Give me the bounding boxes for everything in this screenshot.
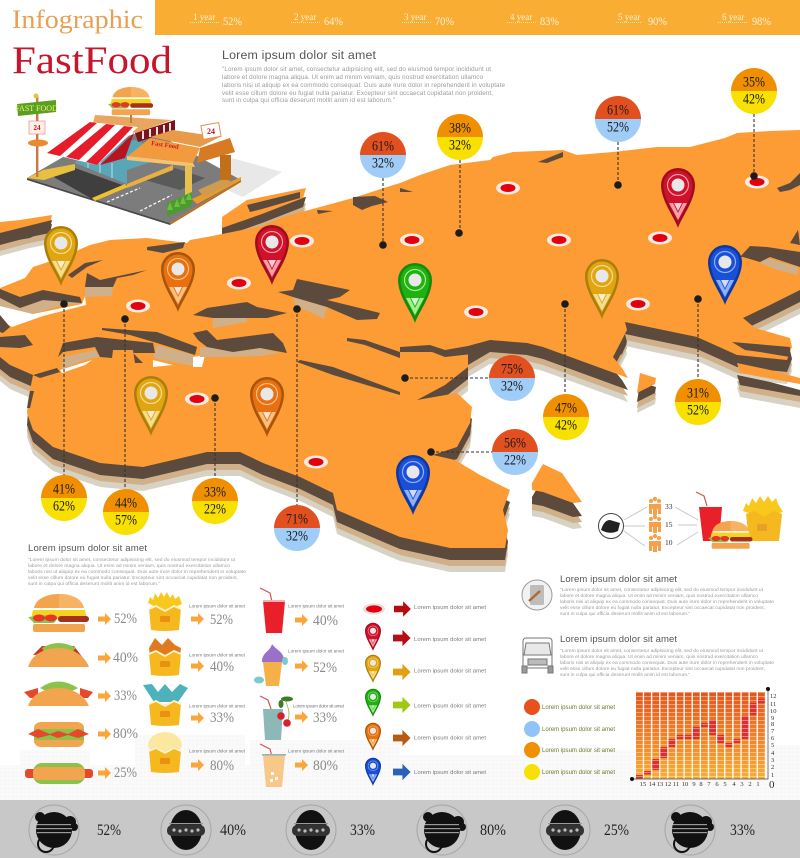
intro text block — [222, 48, 505, 104]
legend gold pin — [365, 655, 486, 683]
left text block: laboris nisi ut aliquip ex ea commodo consequat. Duis aute irure dolor in reprehenderit in voluptate — [28, 569, 246, 575]
blue chicken row — [143, 684, 246, 726]
connector lines — [624, 507, 698, 546]
silhouette 80%: 80% — [480, 822, 506, 839]
popcorn row — [148, 732, 246, 774]
juice row: 80% — [313, 758, 338, 774]
icon: people — [649, 497, 661, 552]
bar chart: 14 — [649, 781, 656, 788]
right text block 1: "Lorem ipsum dolor sit amet, consectetur adipisicing elit, sed do eiusmod tempor incididunt ut — [560, 587, 764, 593]
soda row — [260, 588, 345, 633]
bar chart: 10 — [770, 708, 776, 715]
percentage bubbles: 22% — [504, 452, 526, 468]
hotdog row — [25, 763, 137, 784]
silhouette 40%: 40% — [220, 822, 246, 839]
people to food diagram — [598, 492, 783, 552]
top percentage band: 52% — [223, 14, 242, 28]
percentage bubbles: 41% — [53, 482, 75, 498]
fries row — [148, 592, 246, 631]
top percentage band: 3 year — [404, 12, 426, 22]
percentage bubbles: 62% — [53, 498, 75, 514]
legend orange pin: Lorem ipsum dolor sit amet — [414, 736, 486, 742]
burrito row: 33% — [114, 688, 137, 704]
bar chart: 2 — [748, 781, 752, 788]
fast food restaurant illustration — [15, 87, 282, 225]
silhouette 25%: 25% — [604, 822, 629, 839]
icon: truck — [522, 638, 553, 673]
percentage bubbles: 42% — [555, 418, 577, 434]
intro text block: labore et dolore magna aliqua. Ut enim ad minim veniam, quis nostrud exercitation ullamco — [222, 74, 483, 81]
bar chart: 4 — [771, 750, 775, 757]
icon: phone circle — [522, 580, 552, 610]
map of Eurasia and Africa — [0, 130, 800, 572]
right text block 1: sunt in culpa qui officia deserunt mollit anim id est laborum." — [560, 611, 690, 617]
percentage bubbles: 52% — [607, 120, 629, 136]
pin legend — [363, 601, 486, 786]
top percentage band: 98% — [752, 14, 771, 28]
right text block 1: laboris nisi ut aliquip ex ea commodo consequat. Duis aute irure dolor in reprehenderit in voluptate — [560, 599, 774, 605]
silhouette 25% — [540, 805, 629, 855]
bar chart: 13 — [657, 781, 663, 788]
intro text block: "Lorem ipsum dolor sit amet, consectetur adipisicing elit, sed do eiusmod tempor incididunt ut — [222, 66, 491, 73]
soda row: Lorem ipsum dolor sit amet — [288, 604, 345, 608]
fast food restaurant illustration: 24 — [207, 127, 215, 136]
bar chart — [630, 687, 776, 791]
legend orange pin — [365, 723, 486, 751]
sandwich row: 80% — [113, 726, 138, 742]
bar chart: 1 — [756, 781, 760, 788]
ice cream row: Lorem ipsum dolor sit amet — [288, 648, 345, 654]
right text block 2 — [522, 634, 774, 678]
legend blue pin: Lorem ipsum dolor sit amet — [414, 770, 486, 776]
colour legend: Lorem ipsum dolor sit amet — [542, 770, 615, 776]
food list column 1 — [24, 594, 138, 784]
colour legend: Lorem ipsum dolor sit amet — [542, 705, 615, 711]
percentage bubbles — [41, 68, 777, 551]
counts: 15 — [665, 520, 673, 529]
bar chart: 11 — [673, 781, 679, 788]
counts: 33 — [665, 502, 673, 511]
top percentage band: 4 year — [510, 12, 532, 22]
title: FastFood — [12, 39, 173, 82]
silhouette 33% second: 33% — [730, 822, 755, 839]
legend red pin: Lorem ipsum dolor sit amet — [414, 637, 486, 643]
burger row: 52% — [114, 611, 137, 627]
colour legend: Lorem ipsum dolor sit amet — [542, 748, 615, 754]
juice row: Lorem ipsum dolor sit amet — [288, 748, 345, 754]
bar chart: 8 — [771, 721, 774, 728]
intro text block: laboris nisi ut aliquip ex ea commodo consequat. Duis aute irure dolor in reprehenderit in voluptate — [222, 82, 505, 89]
legend oval: Lorem ipsum dolor sit amet — [414, 605, 486, 611]
title: Infographic — [12, 5, 143, 34]
fast food restaurant illustration: Fast Food — [151, 140, 179, 151]
bar chart: 6 — [771, 735, 775, 742]
percentage bubbles: 31% — [687, 386, 709, 402]
percentage bubbles: 71% — [286, 512, 308, 528]
left text block — [28, 543, 246, 587]
percentage bubbles: 32% — [286, 528, 308, 544]
colour legend — [524, 699, 615, 780]
top percentage band: 6 year — [722, 12, 744, 22]
bar chart: 7 — [771, 728, 775, 735]
percentage bubbles: 57% — [115, 512, 137, 528]
bar chart: 2 — [771, 764, 774, 771]
drinks list column 3 — [254, 588, 345, 787]
burger row — [28, 594, 137, 632]
sandwich row — [28, 722, 138, 747]
bar chart: 3 — [740, 781, 744, 788]
top percentage band: 64% — [324, 14, 343, 28]
fries row: 52% — [210, 612, 233, 628]
taco row — [28, 643, 138, 667]
city skyline background — [0, 735, 800, 800]
chicken row — [149, 638, 246, 676]
icon: meal circle — [598, 514, 624, 538]
left text block: labore et dolore magna aliqua. Ut enim ad minim veniam, quis nostrud exercitation ullamco — [28, 563, 230, 569]
percentage bubbles: 32% — [372, 156, 394, 172]
left text block: sunt in culpa qui officia deserunt mollit anim id est laborum." — [28, 581, 160, 587]
legend gold pin: Lorem ipsum dolor sit amet — [414, 668, 486, 674]
counts: 10 — [665, 538, 673, 547]
legend green pin — [365, 689, 486, 717]
right text block 1: velit esse cillum dolore eu fugiat nulla pariatur. Excepteur sint occaecat cupidatat non proident, — [560, 605, 765, 611]
percentage bubbles: 56% — [504, 436, 526, 452]
counts — [665, 502, 673, 547]
cherry glass row: 33% — [313, 710, 337, 726]
fast food restaurant illustration: FAST FOOD — [15, 104, 58, 113]
right text block 1: Lorem ipsum dolor sit amet — [560, 574, 677, 585]
red oval markers — [126, 176, 769, 468]
blue chicken row: 33% — [210, 710, 234, 726]
icon: soda — [696, 492, 722, 541]
cherry glass row — [260, 696, 345, 740]
colour legend: Lorem ipsum dolor sit amet — [542, 727, 615, 733]
intro text block: sunt in culpa qui officia deserunt mollit anim id est laborum." — [222, 97, 395, 104]
popcorn row: Lorem ipsum dolor sit amet — [189, 748, 246, 754]
top percentage band: 1 year — [193, 12, 215, 22]
silhouette 52% — [29, 805, 121, 855]
fast food restaurant illustration: 24 — [34, 124, 41, 132]
bar chart: 8 — [699, 781, 703, 788]
percentage bubbles: 32% — [449, 138, 471, 154]
title — [12, 5, 173, 82]
silhouette 33% second — [665, 805, 755, 855]
percentage bubbles: 52% — [687, 402, 709, 418]
top percentage band: 83% — [540, 14, 559, 28]
bar chart: 9 — [771, 715, 774, 722]
top percentage band: 5 year — [618, 12, 640, 22]
right text block 2: sunt in culpa qui officia deserunt mollit anim id est laborum." — [560, 672, 690, 678]
legend green pin: Lorem ipsum dolor sit amet — [414, 704, 486, 710]
bar chart: 0 — [769, 779, 775, 791]
silhouette 80% — [417, 805, 506, 855]
chicken row: 40% — [210, 659, 234, 675]
map location pins — [44, 168, 742, 515]
bar chart: 4 — [732, 781, 736, 788]
blue chicken row: Lorem ipsum dolor sit amet — [189, 704, 246, 708]
left text block: velit esse cillum dolore eu fugiat nulla pariatur. Excepteur sint occaecat cupidatat non proident, — [28, 575, 238, 581]
right text block 2: laboris nisi ut aliquip ex ea commodo consequat. Duis aute irure dolor in reprehenderit in voluptate — [560, 660, 774, 666]
top percentage band: 70% — [435, 14, 454, 28]
fries row: Lorem ipsum dolor sit amet — [189, 604, 246, 608]
percentage bubbles: 32% — [501, 378, 523, 394]
bottom grey band — [0, 800, 800, 858]
bar chart: 1 — [771, 772, 774, 779]
bar chart: 5 — [723, 781, 727, 788]
dashed connector lines and dots — [60, 114, 758, 506]
bar chart: 6 — [715, 781, 719, 788]
popcorn row: 80% — [210, 758, 234, 774]
percentage bubbles: 33% — [204, 484, 226, 500]
taco row: 40% — [113, 650, 138, 666]
legend red pin — [365, 623, 486, 651]
silhouette 52%: 52% — [97, 822, 121, 839]
percentage bubbles: 38% — [449, 120, 471, 136]
hotdog row: 25% — [114, 765, 137, 781]
percentage bubbles: 35% — [743, 74, 765, 90]
silhouette 33%: 33% — [350, 822, 375, 839]
top percentage band: 2 year — [294, 12, 316, 22]
percentage bubbles: 47% — [555, 400, 577, 416]
legend oval — [363, 601, 486, 617]
right text block 2: "Lorem ipsum dolor sit amet, consectetur adipisicing elit, sed do eiusmod tempor incididunt ut — [560, 648, 764, 654]
percentage bubbles: 61% — [372, 138, 394, 154]
percentage bubbles: 61% — [607, 102, 629, 118]
left text block: Lorem ipsum dolor sit amet — [28, 543, 147, 554]
bar chart: 12 — [665, 781, 671, 788]
right text block 2: velit esse cillum dolore eu fugiat nulla pariatur. Excepteur sint occaecat cupidatat non proident, — [560, 666, 765, 672]
silhouette 40% — [161, 805, 246, 855]
intro text block: velit esse cillum dolore eu fugiat nulla pariatur. Excepteur sint occaecat cupidatat non proident, — [222, 90, 493, 97]
right text block 2: Lorem ipsum dolor sit amet — [560, 634, 677, 645]
percentage bubbles: 44% — [115, 496, 137, 512]
bar chart: 7 — [707, 781, 711, 788]
left text block: "Lorem ipsum dolor sit amet, consectetur adipisicing elit, sed do eiusmod tempor incididunt ut — [28, 557, 236, 563]
top percentage band: 90% — [648, 14, 667, 28]
bar chart: 5 — [771, 742, 774, 749]
chicken row: Lorem ipsum dolor sit amet — [189, 652, 246, 658]
right text block 1 — [522, 574, 774, 617]
percentage bubbles: 42% — [743, 92, 765, 108]
bar chart: 15 — [640, 781, 646, 788]
bar chart: 12 — [770, 693, 776, 700]
bar chart: 9 — [692, 781, 696, 788]
icon: fries — [743, 496, 783, 541]
icon: burger — [708, 521, 753, 549]
percentage bubbles: 22% — [204, 502, 226, 518]
food list column 2 — [143, 592, 246, 774]
percentage bubbles: 75% — [501, 362, 523, 378]
ice cream row: 52% — [313, 660, 337, 676]
bar chart: 10 — [682, 781, 688, 788]
bar chart: 3 — [771, 757, 774, 764]
soda row: 40% — [313, 613, 338, 629]
silhouette 33% — [286, 805, 375, 855]
burrito row — [24, 682, 137, 706]
legend blue pin — [365, 758, 486, 786]
right text block 2: labore et dolore magna aliqua. Ut enim ad minim veniam, quis nostrud exercitation ullamco — [560, 654, 758, 660]
bar chart: 11 — [770, 701, 776, 708]
right text block 1: labore et dolore magna aliqua. Ut enim ad minim veniam, quis nostrud exercitation ullamco — [560, 593, 758, 599]
intro text block: Lorem ipsum dolor sit amet — [222, 48, 377, 62]
top percentage band — [155, 0, 800, 35]
ice cream row — [254, 644, 345, 686]
cherry glass row: Lorem ipsum dolor sit amet — [293, 704, 345, 708]
juice row — [260, 744, 345, 787]
